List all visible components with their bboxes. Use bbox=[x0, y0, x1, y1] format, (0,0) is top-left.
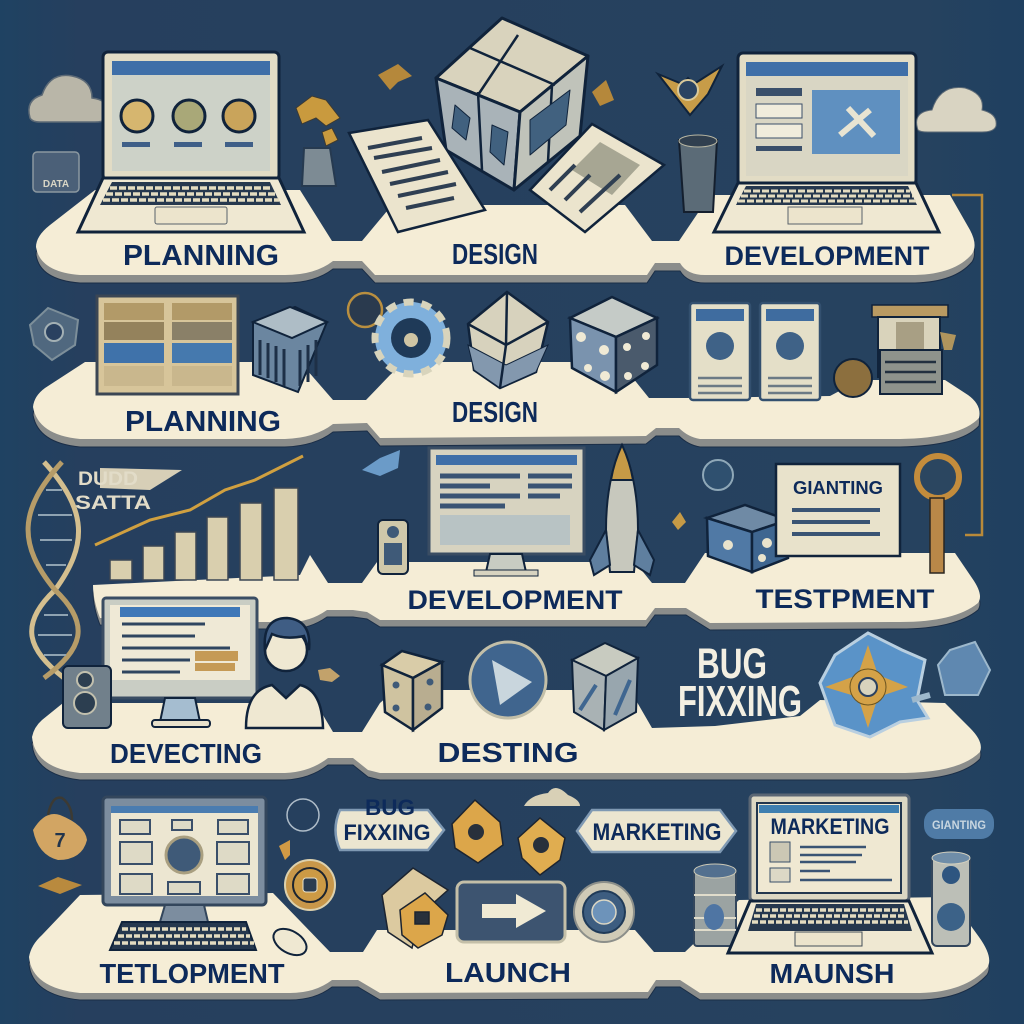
icon: small jar bbox=[302, 148, 336, 186]
heading: Desting: DESTING bbox=[438, 737, 578, 768]
icon: monitor with Gianting text bbox=[776, 464, 900, 556]
tag: Bug Fixing: BUG bbox=[365, 795, 415, 820]
icon: dice row 3 bbox=[707, 505, 788, 572]
tag: Marketing: MARKETING bbox=[592, 819, 722, 846]
icon: cloud top left bbox=[29, 75, 110, 122]
heading: Maunsh: MAUNSH bbox=[770, 958, 894, 989]
heading: Design: DESIGN bbox=[452, 239, 538, 271]
panel: row 4 ribbon bbox=[32, 690, 981, 780]
icon: disc bbox=[574, 882, 634, 942]
icon: gear sun bbox=[658, 66, 722, 115]
icon: laptop with window bbox=[714, 53, 939, 232]
icon: right document bbox=[530, 124, 664, 232]
icon: DNA helix bbox=[28, 462, 79, 678]
icon: small server bbox=[33, 152, 79, 192]
heading: Planning: PLANNING bbox=[125, 406, 281, 438]
icon: gold ring bbox=[348, 293, 382, 327]
icon: desktop with keyboard bbox=[103, 797, 266, 950]
icon: small badge bbox=[703, 460, 733, 490]
panel: row 5 ribbon bbox=[29, 893, 989, 1000]
icon: small star bbox=[672, 512, 686, 530]
icon: phone tower bbox=[378, 520, 408, 574]
icon: small server: DATA bbox=[43, 179, 69, 190]
icon: gold coin bbox=[285, 860, 335, 910]
panel: row 1 ribbon bbox=[36, 190, 975, 283]
text: Bug Fixing large: BUG bbox=[697, 640, 767, 688]
icon: monitor with list bbox=[103, 598, 257, 727]
icon: cylinder cup bbox=[679, 135, 717, 212]
tag: Marketing bbox=[577, 810, 736, 852]
icon: small cloud bbox=[524, 788, 580, 806]
icon: bottle bbox=[932, 852, 970, 946]
text: Dudd Satta label: SATTA bbox=[75, 493, 151, 514]
tag: Bug Fixing: FIXXING bbox=[344, 820, 430, 845]
icon: gold scraps bbox=[296, 96, 340, 146]
icon: faceted gem bbox=[468, 292, 548, 388]
icon: gold scrap bbox=[592, 80, 614, 106]
icon: laptop with three badges bbox=[78, 52, 304, 232]
icon: left document bbox=[349, 120, 485, 232]
icon: gold cube bbox=[382, 868, 448, 948]
icon: blue gear bbox=[375, 302, 447, 374]
tag: small blue label bbox=[924, 809, 994, 839]
heading: Tetlopment: TETLOPMENT bbox=[100, 958, 284, 989]
icon: gold bird top bbox=[378, 64, 412, 90]
icon: gold flake bbox=[279, 840, 290, 860]
icon: laptop with marketing: MARKETING bbox=[770, 814, 890, 839]
icon: shield badge row 2 bbox=[30, 308, 78, 360]
icon: outline ring bbox=[287, 799, 319, 831]
icon: cube row 4 right bbox=[572, 643, 638, 730]
icon: play sphere bbox=[470, 642, 546, 718]
heading: Development: DEVELOPMENT bbox=[408, 585, 623, 615]
icon: speaker bbox=[63, 666, 111, 728]
icon: gold padlock badge: 7 bbox=[54, 830, 66, 852]
panel: row 3 ribbon bbox=[93, 553, 980, 630]
icon: cloud top right bbox=[917, 87, 996, 132]
icon: blue bird bbox=[362, 450, 400, 476]
heading: Devecting: DEVECTING bbox=[110, 738, 262, 769]
icon: computer mouse bbox=[269, 923, 311, 961]
connector line: right side bbox=[952, 195, 982, 535]
text: Bug Fixing large: FIXXING bbox=[678, 677, 802, 726]
text: Dudd Satta label bbox=[75, 468, 182, 514]
icon: person bbox=[246, 618, 323, 728]
icon: isometric cube bbox=[436, 18, 588, 190]
icon: machinery cluster bbox=[834, 305, 956, 397]
icon: gold puzzle gear 2 bbox=[518, 818, 565, 875]
icon: magnifier badge bbox=[912, 642, 990, 700]
icon: coin stack bbox=[694, 864, 736, 946]
icon: gold puzzle gear 1 bbox=[452, 800, 503, 863]
heading: Launch: LAUNCH bbox=[445, 957, 571, 988]
panel: row 2 ribbon bbox=[33, 362, 980, 447]
icon: desktop monitor bbox=[429, 448, 584, 576]
heading: Development: DEVELOPMENT bbox=[724, 241, 930, 271]
button: arrow bbox=[457, 882, 565, 942]
icon: rocket bbox=[590, 445, 654, 575]
heading: Testpment: TESTPMENT bbox=[756, 584, 935, 614]
icon: dashboard screen bbox=[97, 296, 238, 394]
icon: monitor with Gianting text: GIANTING bbox=[793, 478, 883, 498]
icon: dice row 4 left bbox=[382, 651, 442, 730]
icon: gold scrap row 4 bbox=[318, 668, 340, 682]
text: Dudd Satta label: DUDD bbox=[78, 469, 138, 490]
icon: two app cards bbox=[690, 303, 820, 400]
icon: striped cube bbox=[253, 307, 327, 392]
icon: gold arrow bbox=[38, 877, 82, 894]
icon: dice row 2 bbox=[570, 297, 657, 392]
icon: hex shield bbox=[820, 633, 928, 737]
icon: laptop with marketing bbox=[728, 795, 932, 953]
heading: Planning: PLANNING bbox=[123, 240, 279, 272]
tag: small blue label: GIANTING bbox=[932, 818, 986, 832]
text: Bug Fixing large bbox=[678, 640, 802, 726]
tag: Bug Fixing bbox=[336, 795, 444, 850]
icon: magnifier bbox=[917, 456, 959, 573]
heading: Design: DESIGN bbox=[452, 397, 538, 429]
bar chart bbox=[95, 456, 303, 580]
icon: gold padlock badge bbox=[33, 798, 87, 860]
